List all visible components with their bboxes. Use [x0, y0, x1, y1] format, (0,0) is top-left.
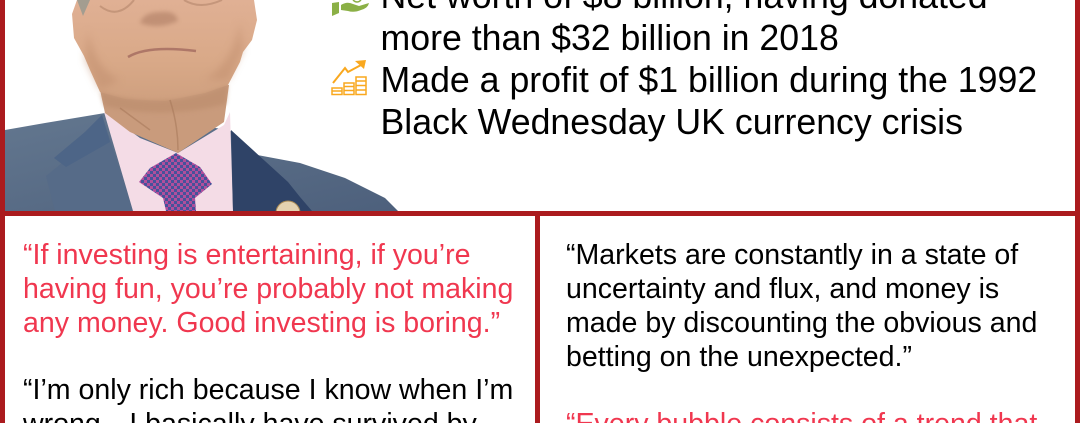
quote: markets: “Markets are constantly in a state of: [566, 239, 1018, 271]
glasses hint: [100, 0, 222, 12]
icon: money in hand: [332, 0, 369, 16]
quote: only rich: [23, 374, 513, 423]
right quotes panel: [566, 239, 1037, 423]
cheek shading: [85, 30, 120, 90]
quote: markets: [566, 239, 1037, 373]
lapel pin: [276, 201, 300, 225]
facts text: [380, 0, 1037, 142]
portrait photo: [5, 0, 398, 211]
facts text: more than $32 billion in 2018: [380, 18, 839, 58]
quote: investing is boring: any money. Good investing is boring.”: [23, 307, 500, 339]
nose shadow: [140, 12, 178, 26]
quote: markets: uncertainty and flux, and money is: [566, 273, 999, 305]
facts text: Black Wednesday UK currency crisis: [380, 102, 963, 142]
head: [72, 0, 257, 101]
quote: markets: made by discounting the obvious and: [566, 307, 1037, 339]
tie knot and blade: [139, 153, 212, 211]
right lapel: [231, 130, 312, 211]
quote: investing is boring: having fun, you’re probably not making: [23, 273, 513, 305]
icon: rising arrow and coins: [331, 60, 367, 96]
left lapel: [46, 115, 133, 211]
quote: investing is boring: [23, 239, 513, 339]
shirt collar: [104, 112, 233, 211]
facts text: Made a profit of $1 billion during the 1992: [380, 60, 1037, 100]
hair: [77, 0, 90, 16]
suit: [5, 113, 398, 211]
quote: only rich: “I’m only rich because I know when I’m: [23, 374, 513, 406]
quote: investing is boring: “If investing is entertaining, if you’re: [23, 239, 470, 271]
chin shadow: [100, 85, 228, 113]
mouth: [128, 49, 196, 57]
neck: [100, 85, 229, 153]
left quotes panel: [23, 239, 513, 423]
quote: markets: betting on the unexpected.”: [566, 341, 912, 373]
neck wrinkle: [120, 100, 178, 150]
